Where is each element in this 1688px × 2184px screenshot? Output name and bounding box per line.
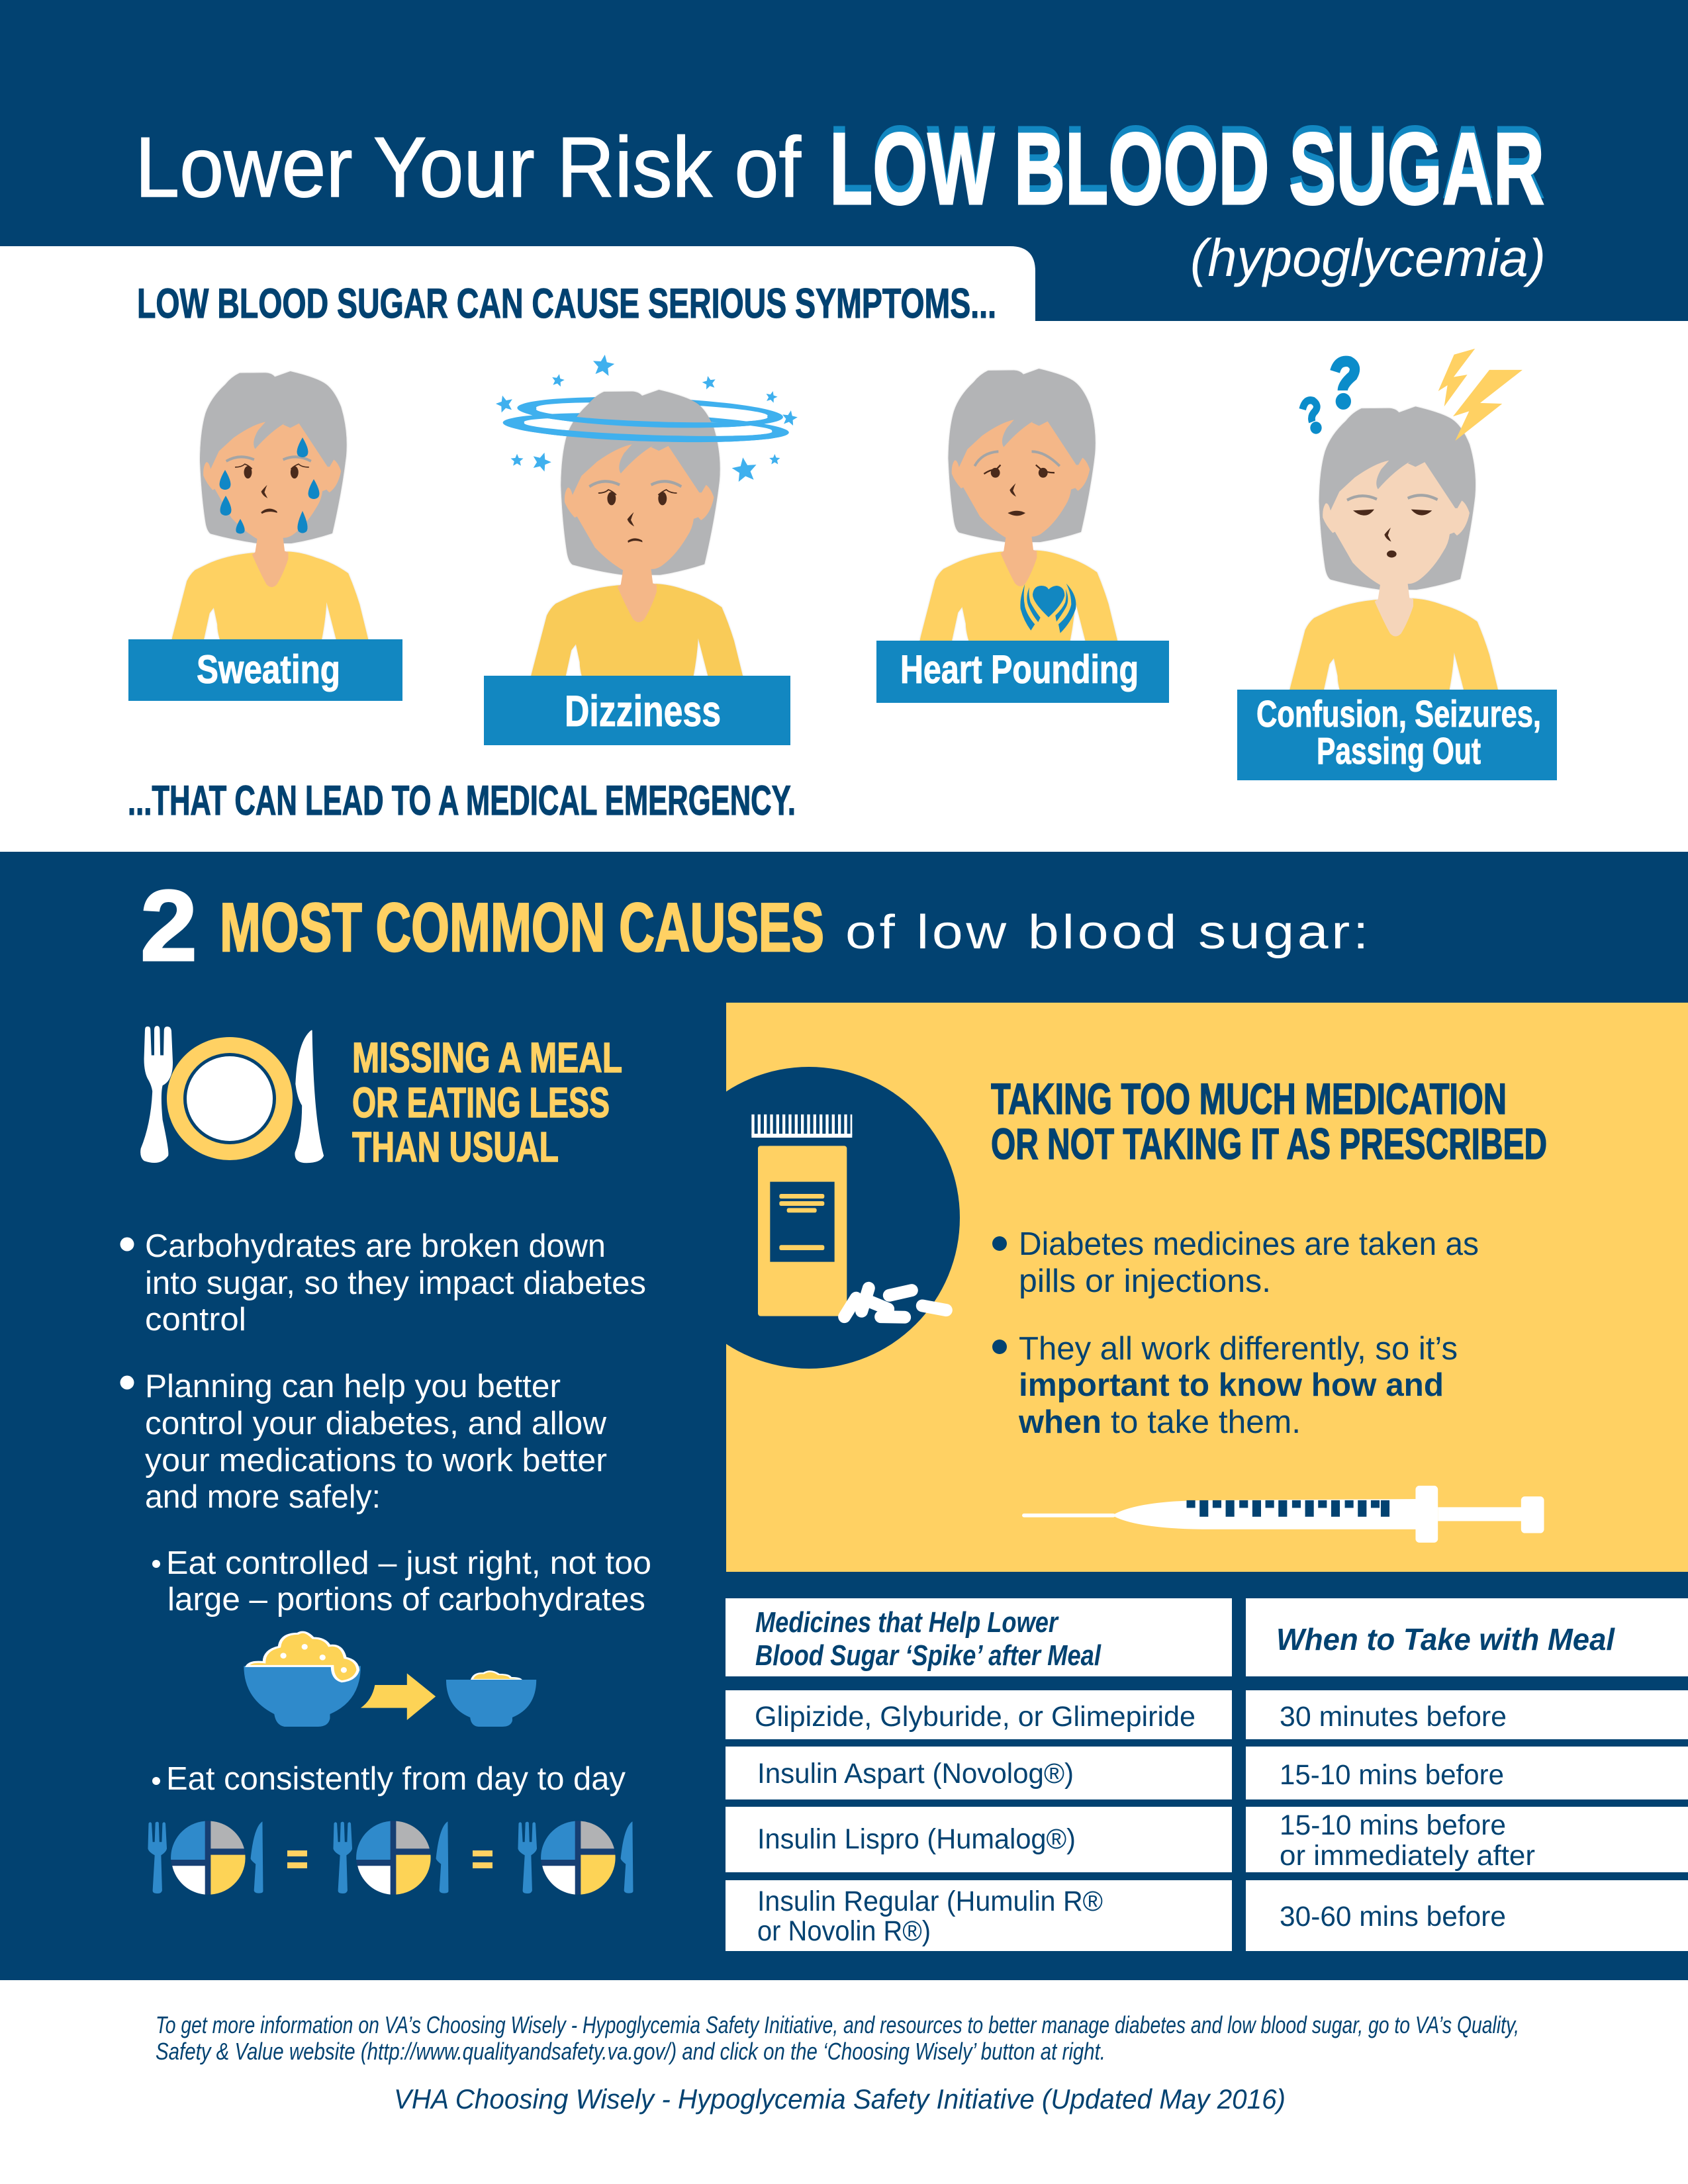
heading: 2 most common causes: MOST COMMON CAUSES xyxy=(220,889,824,966)
table row: insulin aspart xyxy=(726,1747,1688,1799)
figure: sweating woman xyxy=(170,371,370,647)
icon: question marks xyxy=(1303,361,1355,434)
text: planning bullet: your medications to work better xyxy=(145,1443,607,1479)
table header row: When to Take with Meal xyxy=(1276,1622,1615,1657)
text: planning bullet xyxy=(120,1369,607,1515)
heading: symptoms: LOW BLOOD SUGAR CAN CAUSE SERIOUS SYMPTOMS... xyxy=(137,281,996,327)
table row: glipizide: Glipizide, Glyburide, or Glimepiride xyxy=(755,1701,1196,1733)
heading: taking too much medication xyxy=(991,1074,1547,1168)
text: they all work differently bullet: They all work differently, so it’s xyxy=(1019,1331,1458,1367)
text: planning bullet: control your diabetes, and allow xyxy=(145,1406,607,1441)
table row: insulin aspart: Insulin Aspart (Novolog®) xyxy=(757,1758,1074,1790)
heading: missing a meal: MISSING A MEAL xyxy=(352,1034,622,1081)
table row: insulin lispro: 15-10 mins before xyxy=(1280,1809,1506,1841)
text: planning bullet: Planning can help you better xyxy=(145,1369,561,1404)
panel: header band xyxy=(0,0,1688,321)
label: Confusion, Seizures, Passing Out xyxy=(1237,690,1557,780)
text: planning bullet: and more safely: xyxy=(145,1479,381,1515)
table row: insulin regular: 30-60 mins before xyxy=(1280,1901,1506,1933)
panel: medication xyxy=(726,1003,1688,1572)
footer: source credit: VHA Choosing Wisely - Hypoglycemia Safety Initiative (Updated May 2016) xyxy=(394,2083,1286,2115)
text: they all work differently bullet: to take them. xyxy=(1111,1404,1301,1440)
icon: plate with fork and knife xyxy=(140,1026,324,1163)
table row: insulin aspart: 15-10 mins before xyxy=(1280,1759,1504,1791)
table header row: Medicines that Help Lower xyxy=(755,1606,1059,1639)
icon: pill bottle xyxy=(726,1067,960,1369)
icon: sweat drops xyxy=(220,437,319,533)
label: Heart Pounding: Heart Pounding xyxy=(900,647,1139,692)
table row: insulin lispro: or immediately after xyxy=(1280,1840,1535,1872)
table row: glipizide: 30 minutes before xyxy=(1280,1701,1507,1733)
heading: 2 most common causes xyxy=(140,870,1372,982)
heading: 2 most common causes: 2 xyxy=(140,870,197,982)
text: diabetes medicines bullet xyxy=(992,1226,1479,1299)
figure: confused woman xyxy=(1288,406,1501,700)
table header row xyxy=(726,1598,1688,1676)
text: eat controlled sub-bullet: Eat controlled – just right, not too xyxy=(166,1545,651,1581)
text: they all work differently bullet: important to know how and xyxy=(1019,1367,1444,1403)
heading: medical emergency: ...THAT CAN LEAD TO A MEDICAL EMERGENCY. xyxy=(128,778,796,824)
table row: glipizide xyxy=(726,1690,1688,1739)
table row: insulin regular xyxy=(726,1880,1688,1951)
text: eat controlled sub-bullet: large – portions of carbohydrates xyxy=(167,1582,645,1617)
table row: insulin lispro: Insulin Lispro (Humalog®) xyxy=(757,1823,1076,1855)
heading: 2 most common causes: of low blood sugar: xyxy=(845,906,1372,959)
icon: large bowl to small bowl xyxy=(244,1632,536,1727)
text: they all work differently bullet: when xyxy=(1018,1404,1102,1440)
text: carbohydrates bullet: into sugar, so they impact diabetes xyxy=(145,1265,646,1301)
title xyxy=(135,105,1544,226)
heading: missing a meal: OR EATING LESS xyxy=(352,1079,610,1126)
label: Sweating: Sweating xyxy=(197,647,340,692)
label: Confusion, Seizures, Passing Out: Confusion, Seizures, xyxy=(1256,693,1541,735)
icon: three equal plates xyxy=(148,1821,633,1895)
subtitle: hypoglycemia: (hypoglycemia) xyxy=(1190,228,1546,287)
figure: heart pounding woman xyxy=(919,369,1119,646)
label: Heart Pounding xyxy=(876,641,1169,703)
table header row: Blood Sugar ‘Spike’ after Meal xyxy=(755,1639,1102,1672)
label: Sweating xyxy=(128,639,402,701)
figure: dizzy woman xyxy=(494,353,798,686)
heading: taking too much medication: TAKING TOO MUCH MEDICATION xyxy=(991,1074,1507,1123)
table row: insulin regular: Insulin Regular (Humulin R® xyxy=(757,1886,1103,1917)
table row: insulin lispro xyxy=(726,1807,1688,1872)
heading: missing a meal xyxy=(352,1034,622,1171)
text: eat consistently sub-bullet: Eat consistently from day to day xyxy=(166,1761,626,1797)
icon: heart in hands xyxy=(1020,584,1076,633)
text: carbohydrates bullet: control xyxy=(145,1302,246,1338)
icon: syringe xyxy=(1022,1486,1544,1543)
text: they all work differently bullet xyxy=(992,1331,1458,1440)
text: carbohydrates bullet xyxy=(120,1228,646,1338)
title: Lower Your Risk of xyxy=(135,120,802,215)
text: diabetes medicines bullet: pills or injections. xyxy=(1019,1263,1271,1299)
label: Confusion, Seizures, Passing Out: Passing Out xyxy=(1317,730,1481,772)
table row: insulin regular: or Novolin R®) xyxy=(757,1915,931,1947)
label: Dizziness: Dizziness xyxy=(565,686,721,735)
icon: lightning bolts xyxy=(1438,349,1523,441)
panel: causes background xyxy=(0,852,1688,1980)
text: carbohydrates bullet: Carbohydrates are broken down xyxy=(145,1228,606,1264)
label: Dizziness xyxy=(484,676,790,745)
text: diabetes medicines bullet: Diabetes medicines are taken as xyxy=(1019,1226,1479,1262)
table: medicines and timing xyxy=(726,1598,1688,1951)
footer: more information note xyxy=(156,2011,1519,2065)
footer: more information note: Safety & Value website (http://www.qualityandsafety.va.gov/) and click on the ‘Choosing Wisely’ button at right. xyxy=(156,2038,1105,2065)
text: eat controlled sub-bullet xyxy=(152,1545,651,1617)
heading: missing a meal: THAN USUAL xyxy=(352,1123,559,1171)
